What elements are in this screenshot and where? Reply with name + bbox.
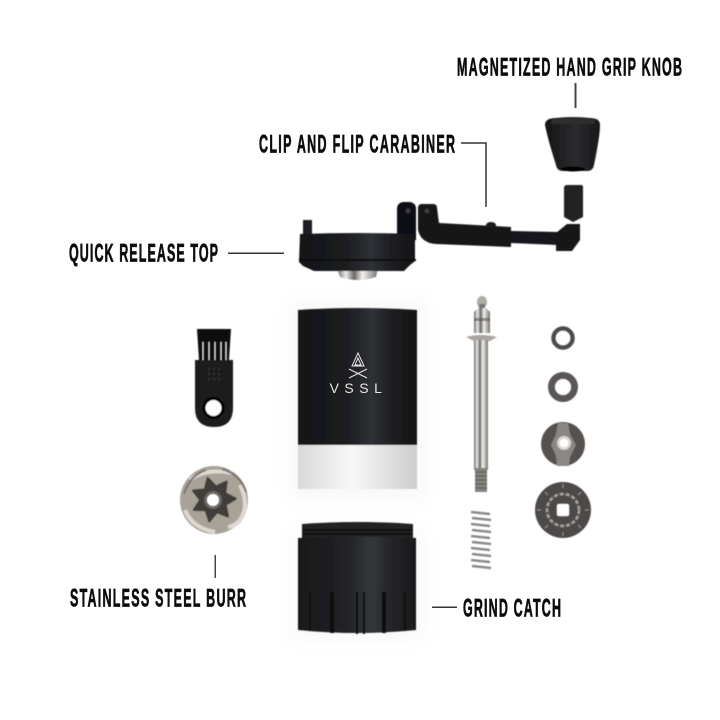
icon: washer ring bbox=[554, 328, 572, 348]
label: quick release top: QUICK RELEASE TOP bbox=[69, 240, 218, 268]
icon: grind catch bbox=[290, 522, 425, 640]
icon: quick release top bbox=[299, 220, 416, 280]
icon: main shaft bbox=[466, 296, 497, 492]
label: grind catch: GRIND CATCH bbox=[463, 595, 561, 623]
icon: spring bbox=[471, 512, 491, 568]
icon: stainless steel burr bbox=[180, 466, 248, 534]
icon: adjustment disc bbox=[535, 482, 591, 538]
icon: hex post and crank arm bbox=[397, 185, 583, 251]
label: clip and flip carabiner bbox=[259, 131, 486, 207]
icon: winged nut bbox=[541, 422, 585, 466]
label: stainless steel burr: STAINLESS STEEL BURR bbox=[70, 585, 246, 613]
icon: body cylinder bbox=[290, 300, 425, 500]
icon: cleaning brush bbox=[195, 329, 233, 427]
icon: conical washer bbox=[552, 376, 574, 398]
icon: VSSL logo bbox=[330, 353, 387, 396]
icon: VSSL logo: VSSL bbox=[330, 380, 387, 396]
label: magnetized hand grip knob: MAGNETIZED HAND GRIP KNOB bbox=[457, 54, 682, 82]
icon: hand grip knob bbox=[545, 117, 600, 172]
label: clip and flip carabiner: CLIP AND FLIP CARABINER bbox=[259, 131, 455, 159]
